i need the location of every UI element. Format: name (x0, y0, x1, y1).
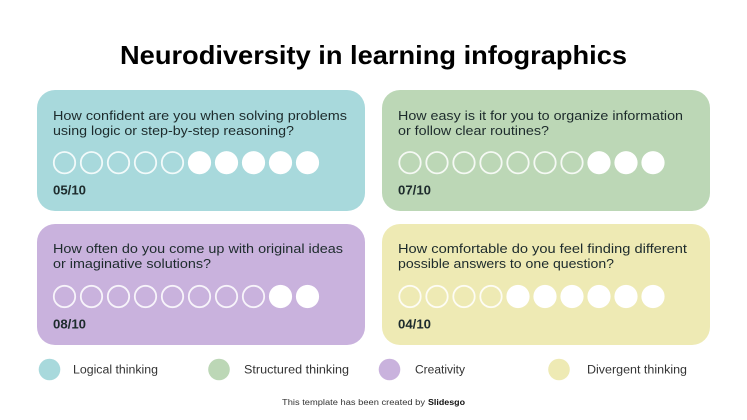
score: 07/10 (398, 182, 431, 198)
rating circles 7 of 10 (399, 151, 665, 174)
footer credit: Slidesgo (428, 398, 465, 407)
panel: creativity (37, 224, 365, 345)
footer credit (282, 398, 465, 407)
title: Neurodiversity in learning infographics (120, 40, 627, 70)
legend item: creativity (379, 359, 465, 380)
score: 04/10 (398, 316, 431, 332)
legend item: divergent thinking: Divergent thinking (587, 364, 687, 376)
score: 05/10 (53, 182, 86, 198)
legend item: divergent thinking (548, 359, 687, 380)
legend item: structured thinking: Structured thinking (244, 364, 349, 376)
panel: divergent thinking (382, 224, 710, 345)
legend item: creativity: Creativity (415, 364, 465, 376)
rating circles 8 of 10 (54, 285, 319, 308)
panel: logical thinking (37, 90, 365, 211)
legend item: structured thinking (208, 359, 349, 380)
panel: structured thinking (382, 90, 710, 211)
footer credit: This template has been created by (282, 398, 425, 407)
question text (53, 241, 344, 271)
legend item: logical thinking (39, 359, 158, 380)
legend (39, 359, 687, 380)
question text: How easy is it for you to organize information (398, 108, 683, 123)
question text (398, 108, 683, 138)
question text (53, 108, 348, 138)
question text: How often do you come up with original ideas (53, 241, 344, 256)
score: 08/10 (53, 316, 86, 332)
question text (398, 241, 687, 271)
question text: or imaginative solutions? (53, 256, 211, 271)
question text: using logic or step-by-step reasoning? (53, 123, 294, 138)
rating circles 4 of 10 (399, 285, 665, 308)
question text: How confident are you when solving problems (53, 108, 348, 123)
rating circles 5 of 10 (54, 151, 319, 174)
legend item: logical thinking: Logical thinking (73, 364, 158, 376)
question text: possible answers to one question? (398, 256, 614, 271)
question text: or follow clear routines? (398, 123, 549, 138)
question text: How comfortable do you feel finding different (398, 241, 687, 256)
